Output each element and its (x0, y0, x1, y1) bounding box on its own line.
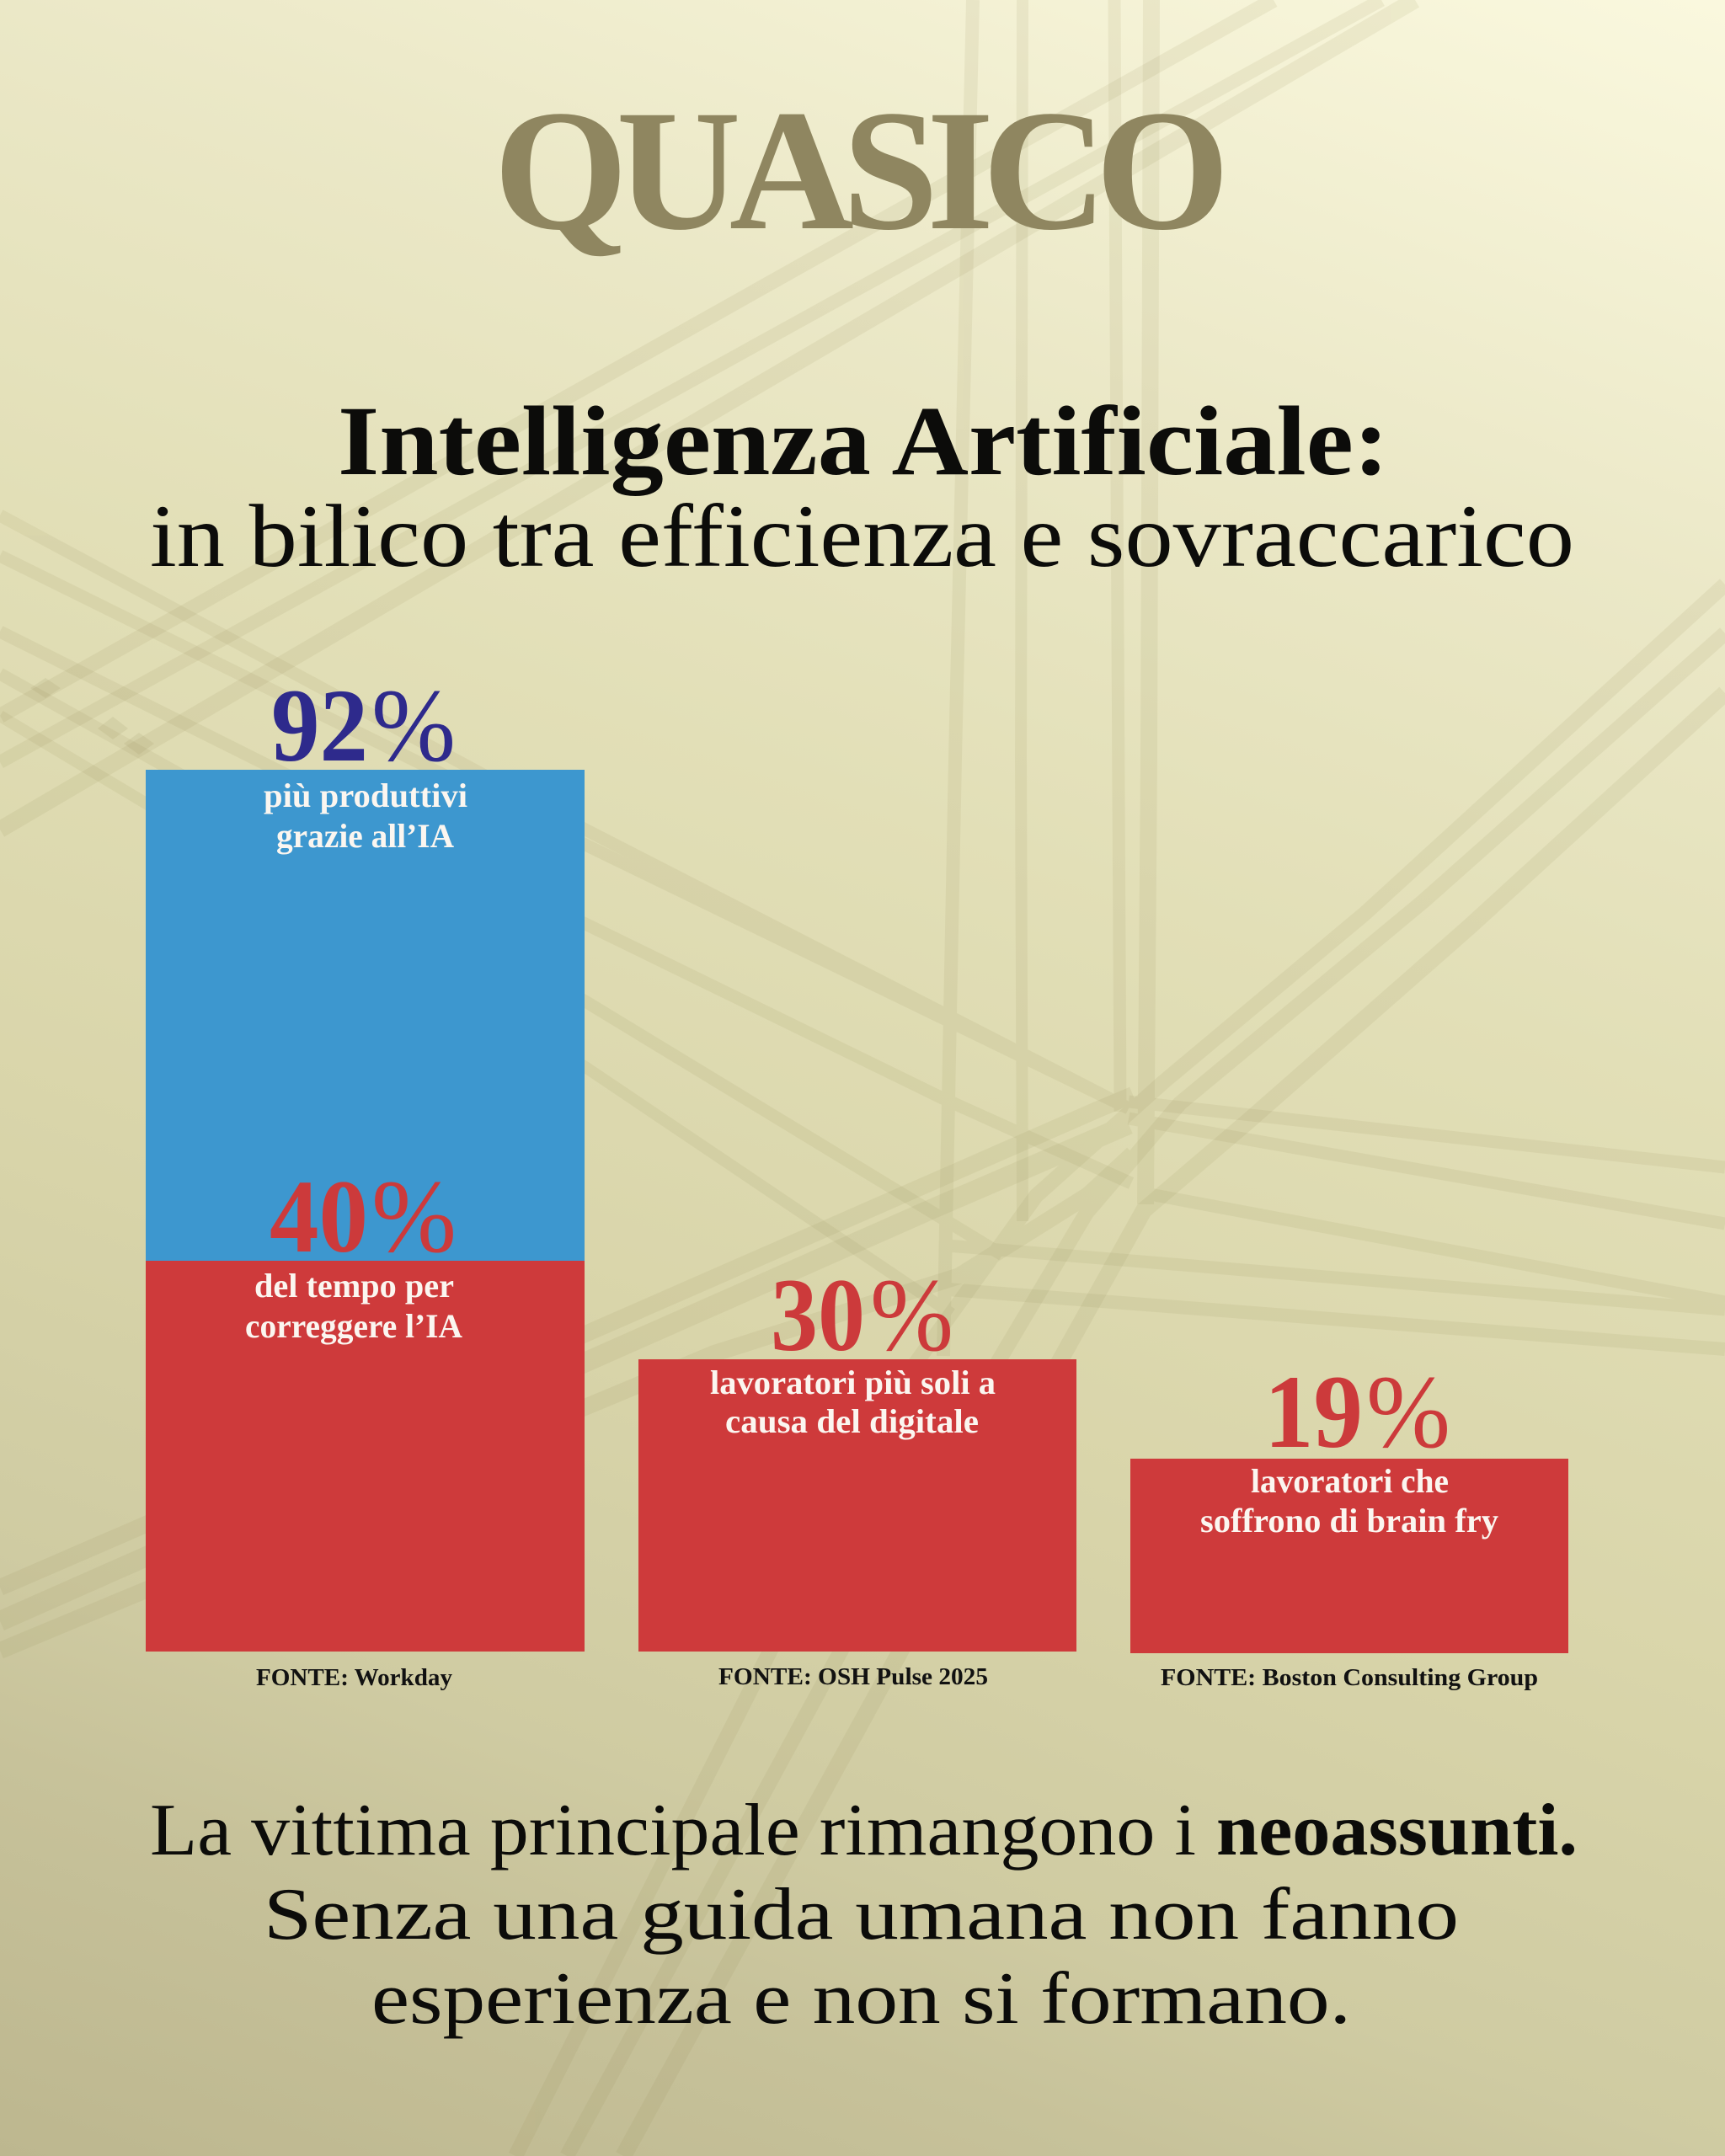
closing statement: esperienza e non si formano. (371, 1958, 1351, 2040)
bar 1: red 40% segment (146, 1159, 585, 1652)
value: 92%: 92 (271, 668, 368, 783)
value: 30% (771, 1257, 953, 1373)
caption: più produttivi grazie all'IA (264, 776, 467, 855)
source: OSH Pulse 2025: FONTE: OSH Pulse 2025 (718, 1664, 988, 1690)
bar 3: red 19% (1130, 1354, 1568, 1653)
bar chart (146, 668, 1568, 1691)
caption: del tempo per correggere l'IA: correggere l’IA (245, 1307, 462, 1345)
value: 30%: % (870, 1257, 953, 1373)
caption: lavoratori che soffrono di brain fry (1200, 1462, 1498, 1540)
caption: lavoratori che soffrono di brain fry: soffrono di brain fry (1200, 1502, 1498, 1540)
caption: lavoratori più soli a causa del digitale (710, 1364, 996, 1440)
closing statement: La vittima principale rimangono i (150, 1790, 1196, 1871)
subheading: in bilico tra efficienza e sovraccarico (150, 487, 1574, 585)
caption: del tempo per correggere l'IA: del tempo per (254, 1267, 454, 1305)
value: 40% (270, 1159, 457, 1274)
value: 40%: 40 (270, 1159, 368, 1274)
caption: più produttivi grazie all'IA: grazie all’IA (276, 817, 454, 855)
caption: più produttivi grazie all'IA: più produttivi (264, 776, 467, 814)
value: 30%: 30 (771, 1257, 865, 1373)
value: 92% (271, 668, 456, 783)
caption: lavoratori più soli a causa del digitale: causa del digitale (725, 1402, 979, 1440)
bar 1: blue 92% segment (146, 668, 585, 1262)
heading: Intelligenza Artificiale: (338, 386, 1389, 496)
caption: lavoratori che soffrono di brain fry: lavoratori che (1251, 1462, 1449, 1500)
closing statement (150, 1790, 1578, 2040)
value: 19% (1264, 1354, 1450, 1470)
source: Workday: FONTE: Workday (256, 1665, 452, 1691)
bar 2: red 30% (638, 1257, 1076, 1652)
value: 40%: % (371, 1159, 457, 1274)
value: 19%: % (1366, 1354, 1450, 1470)
closing statement: Senza una guida umana non fanno (264, 1874, 1459, 1956)
value: 92%: % (371, 668, 456, 783)
logo: QUASICO: QUASICO (494, 75, 1230, 266)
title block (150, 386, 1574, 585)
caption: lavoratori più soli a causa del digitale: lavoratori più soli a (710, 1364, 996, 1401)
value: 19%: 19 (1264, 1354, 1363, 1470)
closing statement: neoassunti. (1216, 1790, 1578, 1871)
source: Boston Consulting Group: FONTE: Boston Consulting Group (1161, 1665, 1538, 1691)
caption: del tempo per correggere l'IA (245, 1267, 462, 1345)
